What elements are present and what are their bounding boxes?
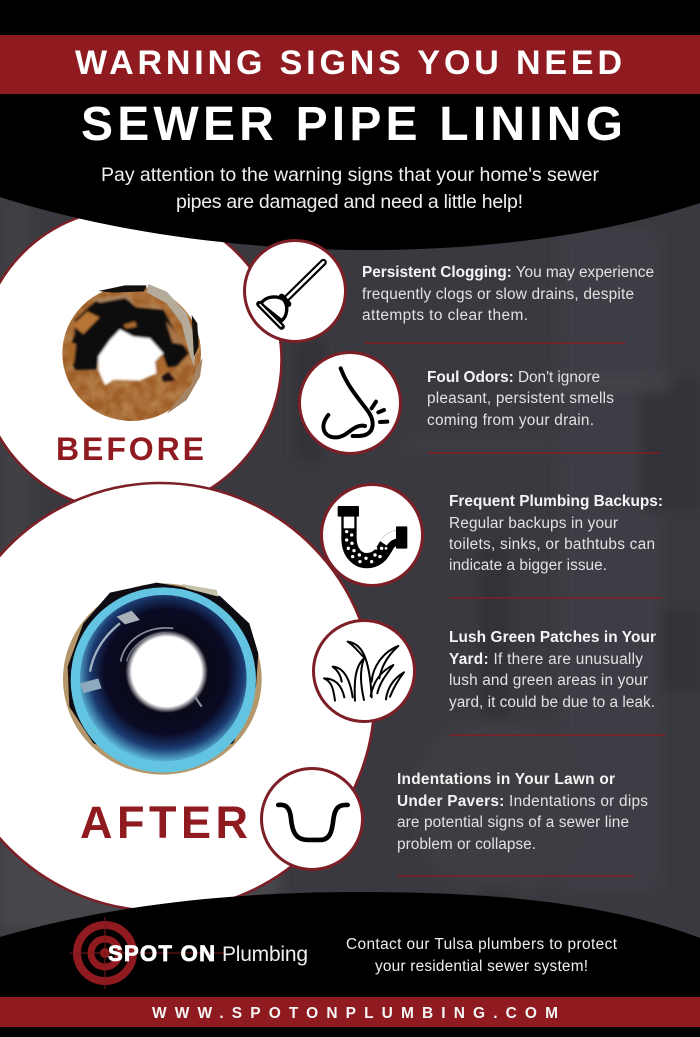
after circle panel bbox=[0, 483, 374, 911]
contact text bbox=[346, 936, 618, 975]
item 1: persistent clogging: Persistent Clogging: You may experience bbox=[362, 264, 654, 281]
item 3: frequent plumbing backups: Frequent Plumbing Backups: bbox=[449, 493, 663, 510]
top black header shape bbox=[0, 0, 700, 250]
after label: AFTER bbox=[80, 797, 248, 848]
item 2: foul odors bbox=[427, 369, 614, 429]
logo: Spot On Plumbing: SPOT ON bbox=[108, 941, 215, 966]
item 4: lush green patches: yard, it could be due to a leak. bbox=[449, 694, 655, 711]
item 5: indentations: are potential signs of a sewer line bbox=[397, 814, 629, 831]
item 4: lush green patches: Yard: If there are unusually bbox=[449, 651, 643, 668]
header red band bbox=[0, 35, 700, 94]
logo target icon bbox=[70, 917, 225, 989]
item 4: lush green patches: lush and green areas in your bbox=[449, 672, 648, 689]
heading line one: WARNING SIGNS YOU NEED bbox=[75, 44, 622, 82]
item 5: indentations: Indentations in Your Lawn or bbox=[397, 771, 615, 788]
intro text bbox=[101, 164, 600, 213]
item 1: persistent clogging bbox=[362, 264, 654, 324]
item 5: indentations: problem or collapse. bbox=[397, 836, 536, 853]
item 3: frequent plumbing backups: indicate a bigger issue. bbox=[449, 557, 607, 574]
footer black shape bbox=[0, 892, 700, 1037]
item 1: persistent clogging: frequently clogs or slow drains, despite bbox=[362, 286, 634, 303]
icon: grass bbox=[314, 620, 414, 722]
intro text: pipes are damaged and need a little help! bbox=[176, 191, 523, 213]
contact text: your residential sewer system! bbox=[375, 958, 588, 975]
website url: WWW.SPOTONPLUMBING.COM bbox=[152, 1005, 558, 1022]
icon: ground indentation bbox=[262, 768, 362, 870]
icon: plunger bbox=[244, 240, 346, 342]
logo: Spot On Plumbing bbox=[70, 917, 308, 989]
footer red band bbox=[0, 997, 700, 1027]
item 4: lush green patches bbox=[449, 629, 656, 711]
damaged rusty pipe photo bbox=[62, 284, 203, 421]
item 5: indentations bbox=[397, 771, 648, 853]
heading line two: SEWER PIPE LINING bbox=[81, 98, 623, 151]
icon: nose bbox=[300, 352, 400, 454]
icon: clogged pipe trap bbox=[322, 484, 422, 586]
item 3: frequent plumbing backups bbox=[449, 493, 663, 574]
item 1: persistent clogging: attempts to clear them. bbox=[362, 307, 528, 324]
relined pipe photo bbox=[63, 583, 262, 775]
before label: BEFORE bbox=[56, 431, 204, 467]
item 4: lush green patches: Lush Green Patches in Your bbox=[449, 629, 656, 646]
item 3: frequent plumbing backups: Regular backups in your bbox=[449, 515, 618, 532]
contact text: Contact our Tulsa plumbers to protect bbox=[346, 936, 618, 953]
item 3: frequent plumbing backups: toilets, sinks, or bathtubs can bbox=[449, 536, 655, 553]
item 2: foul odors: Foul Odors: Don't ignore bbox=[427, 369, 600, 386]
item 2: foul odors: pleasant, persistent smells bbox=[427, 390, 614, 407]
intro text: Pay attention to the warning signs that your home's sewer bbox=[101, 164, 600, 186]
before circle panel bbox=[0, 208, 282, 512]
item 2: foul odors: coming from your drain. bbox=[427, 412, 594, 429]
logo: Spot On Plumbing: Plumbing bbox=[222, 943, 308, 966]
item 5: indentations: Under Pavers: Indentations or dips bbox=[397, 793, 648, 810]
